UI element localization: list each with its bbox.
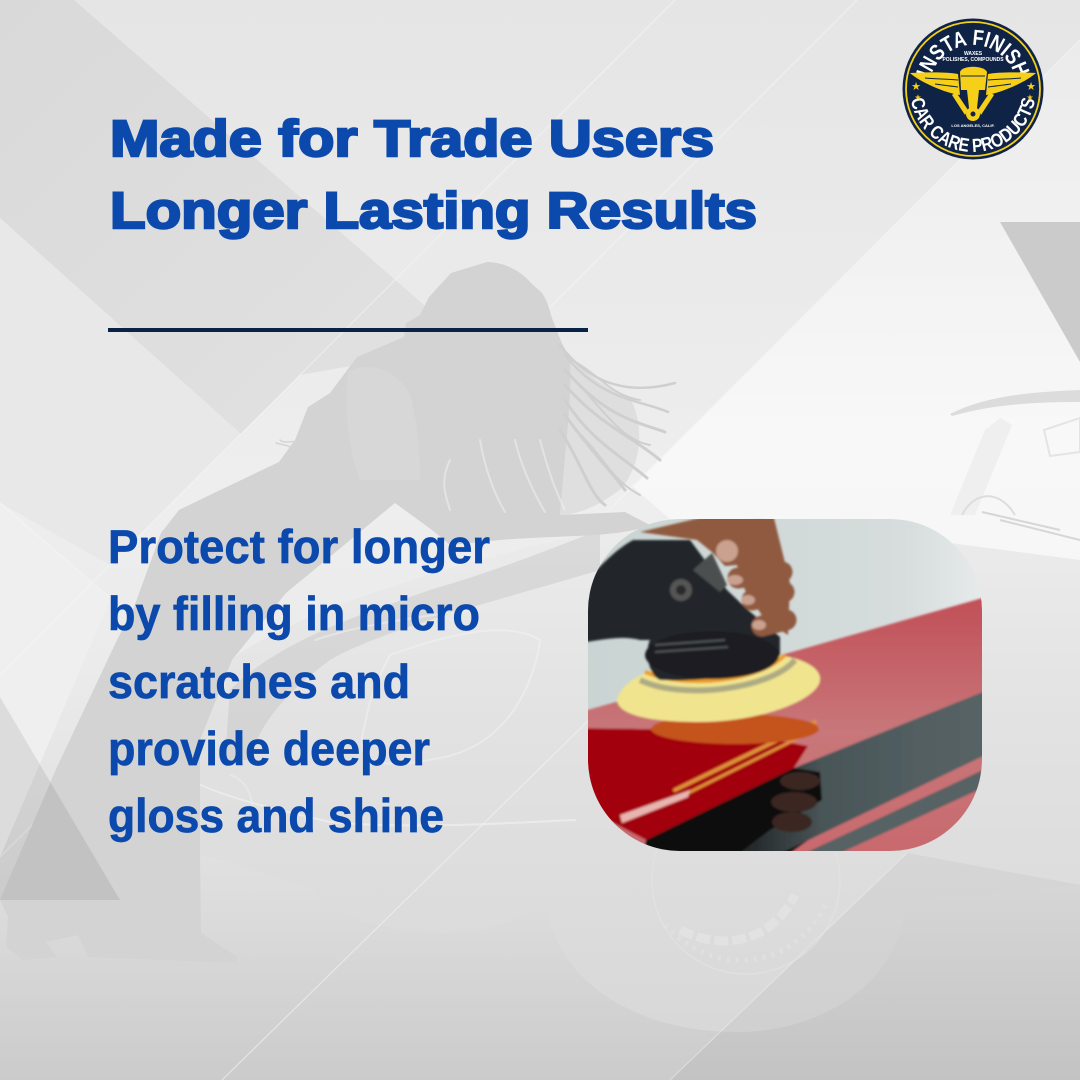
body text: provide deeper [108, 722, 430, 775]
polishing pad [651, 714, 819, 744]
background: car silhouette [190, 390, 1080, 1032]
body text: by filling in micro [108, 587, 480, 640]
polish streaks [675, 722, 818, 797]
car paint panel [588, 597, 982, 851]
title: Longer Lasting Results [110, 182, 757, 239]
racing stripes [740, 691, 982, 851]
background: diagonal facet over wheel and floor [222, 720, 1080, 1080]
logo: Insta Finish badge [902, 18, 1044, 160]
body text: scratches and [108, 655, 410, 708]
body text [108, 520, 490, 842]
logo text: waxes: WAXES [964, 51, 983, 57]
photo: hand polishing red car [588, 519, 982, 851]
logo text: polishes: POLISHES, COMPOUNDS [942, 57, 1004, 63]
body text: Protect for longer [108, 520, 490, 573]
logo icon: stars [911, 80, 1036, 102]
background: wire wheel [652, 786, 840, 974]
background: translucent triangle, lower left [0, 697, 120, 900]
body text: gloss and shine [108, 789, 444, 842]
background: woman silhouette [0, 262, 675, 963]
logo icon: stars: ★ [1026, 93, 1034, 102]
logo text: car care products: CAR CARE PRODUCTS [912, 98, 1034, 152]
reflected fingers [771, 772, 820, 832]
divider rule [108, 328, 588, 332]
photo contents, softly blurred [588, 519, 982, 851]
logo icon: stars: ★ [1026, 80, 1036, 93]
logo icon: stars: ★ [911, 80, 921, 93]
hand [640, 510, 790, 635]
logo icon: winged piston [910, 67, 1036, 121]
logo text: brand name: INSTA FINISH [916, 30, 1030, 73]
title: Made for Trade Users [110, 110, 714, 167]
logo text: location: LOS ANGELES, CALIF. [951, 123, 995, 128]
logo icon: stars: ★ [914, 93, 922, 102]
polisher machine [570, 540, 780, 680]
title [110, 110, 757, 239]
